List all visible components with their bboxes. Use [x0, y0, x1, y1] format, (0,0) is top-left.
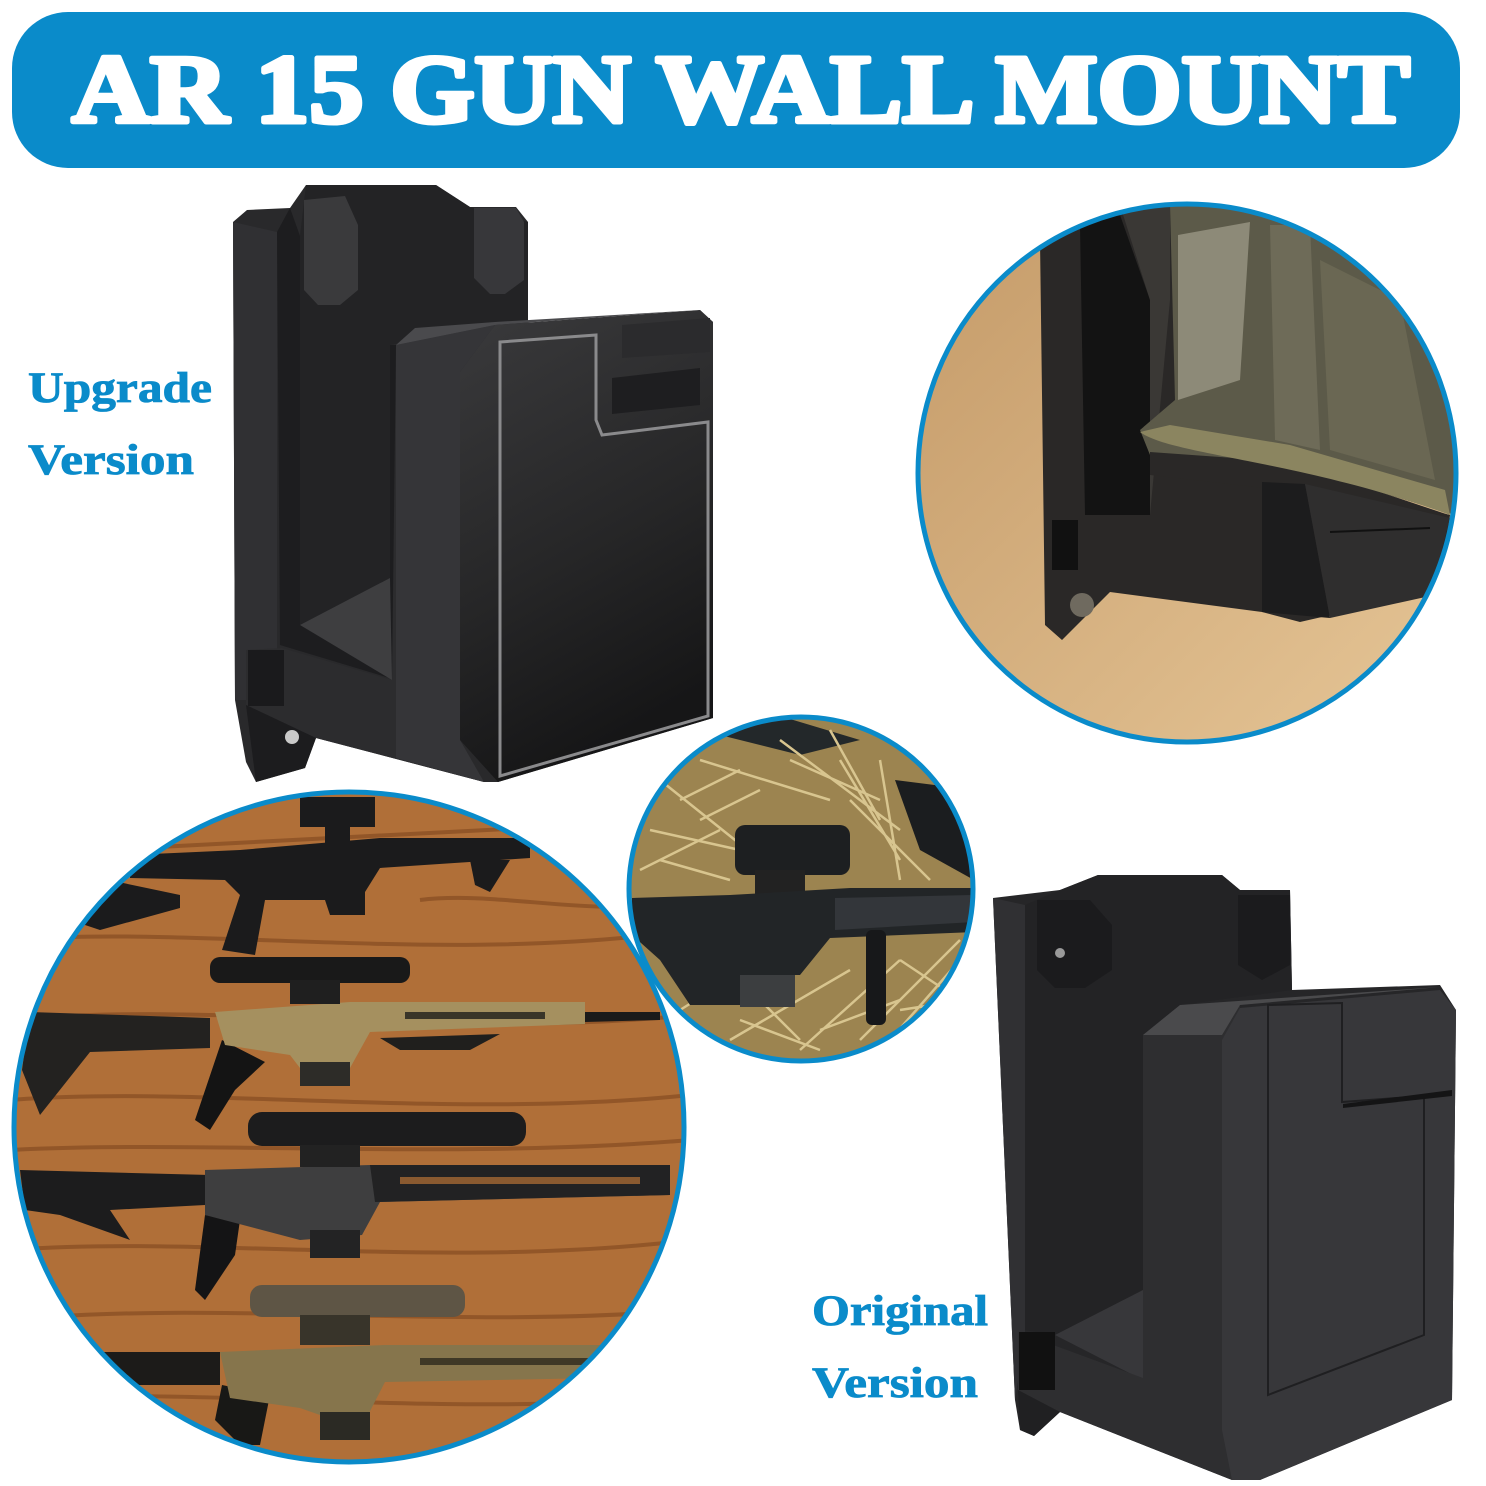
- label: upgrade version: Upgrade: [28, 365, 212, 412]
- front panel outline: [500, 335, 708, 776]
- label: upgrade version: Version: [28, 437, 194, 484]
- left peg slot: [304, 196, 358, 305]
- magazine: [1140, 205, 1455, 515]
- rifle 4: [100, 1285, 600, 1445]
- upgrade version mount product: [233, 185, 713, 782]
- label: original version: Original: [812, 1288, 988, 1335]
- label: original version: [812, 1288, 988, 1407]
- receiver: [632, 888, 974, 1005]
- original version mount product: [993, 875, 1456, 1480]
- label: original version: Version: [812, 1360, 978, 1407]
- title: AR 15 GUN WALL MOUNT: [72, 36, 1410, 144]
- rifle 1: [85, 797, 530, 955]
- right peg slot: [474, 208, 524, 294]
- rifle 3: [20, 1112, 670, 1300]
- optic: [735, 825, 850, 875]
- rifle 2: [22, 957, 660, 1130]
- photo circle: rifle in dry grass: [628, 716, 974, 1062]
- title banner: [12, 12, 1460, 168]
- photo circle: four rifles on wood floor: [10, 790, 690, 1465]
- right peg slot: [1238, 895, 1290, 980]
- label: upgrade version: [28, 365, 212, 484]
- left peg slot: [1037, 900, 1112, 988]
- photo circle: mount on wall with magazine: [915, 200, 1460, 745]
